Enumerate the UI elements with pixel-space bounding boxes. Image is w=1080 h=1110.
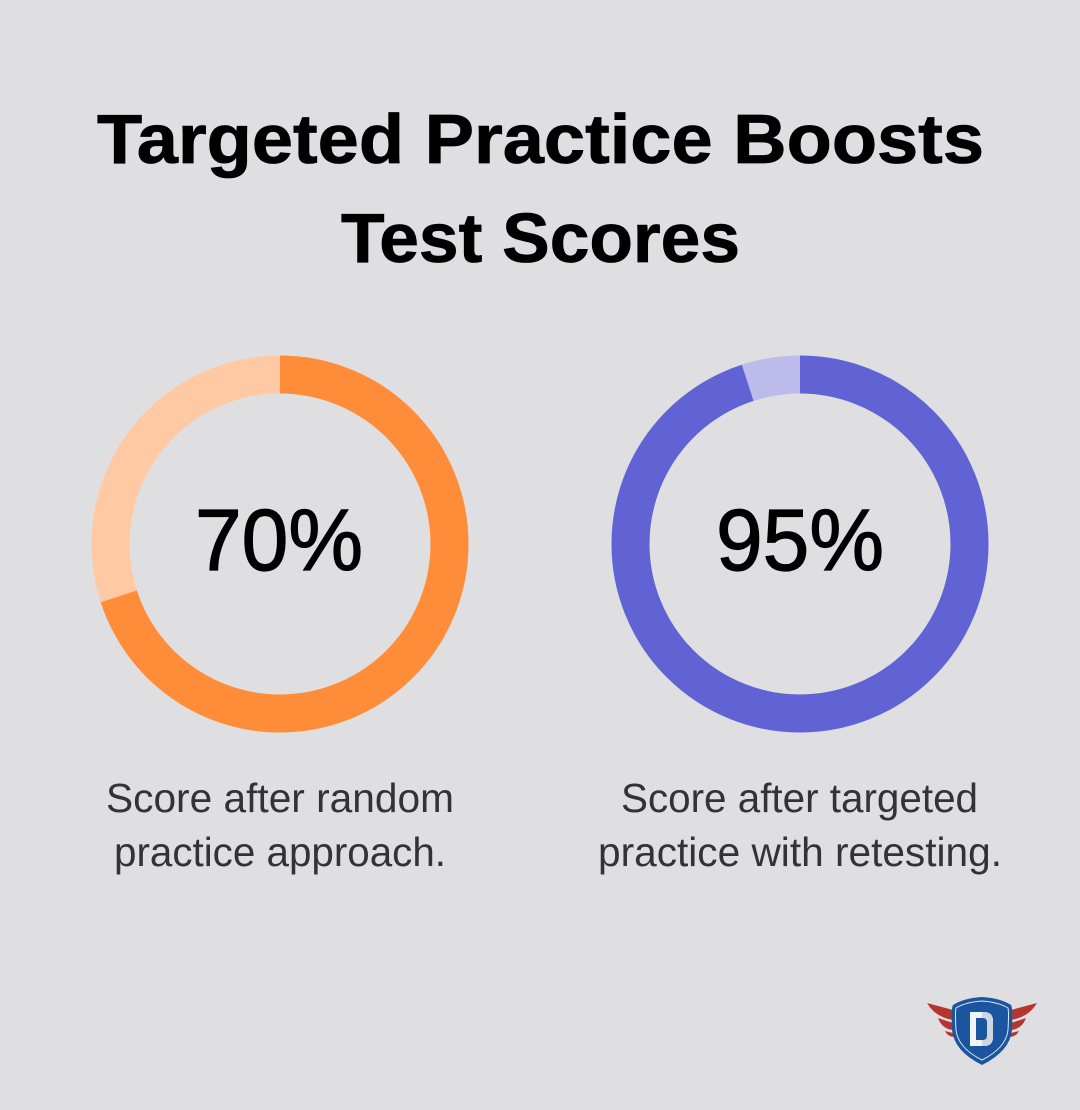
value: 95%: 95% xyxy=(716,492,884,589)
donut chart: 95% xyxy=(630,374,970,714)
caption: targeted practice xyxy=(598,775,1002,875)
caption: random practice xyxy=(106,775,454,875)
caption: random practice: practice approach. xyxy=(114,829,446,875)
caption: targeted practice: Score after targeted xyxy=(621,775,978,821)
icon: shield logo with wings xyxy=(927,997,1037,1065)
title xyxy=(97,100,984,277)
donut chart: 70% xyxy=(110,374,450,714)
title: Targeted Practice Boosts xyxy=(97,100,984,178)
panel: random practice xyxy=(106,374,454,875)
title: Test Scores xyxy=(341,199,740,277)
caption: targeted practice: practice with retesting. xyxy=(598,829,1002,875)
caption: random practice: Score after random xyxy=(106,775,454,821)
panel: targeted practice xyxy=(598,374,1002,875)
value: 70%: 70% xyxy=(195,492,363,589)
